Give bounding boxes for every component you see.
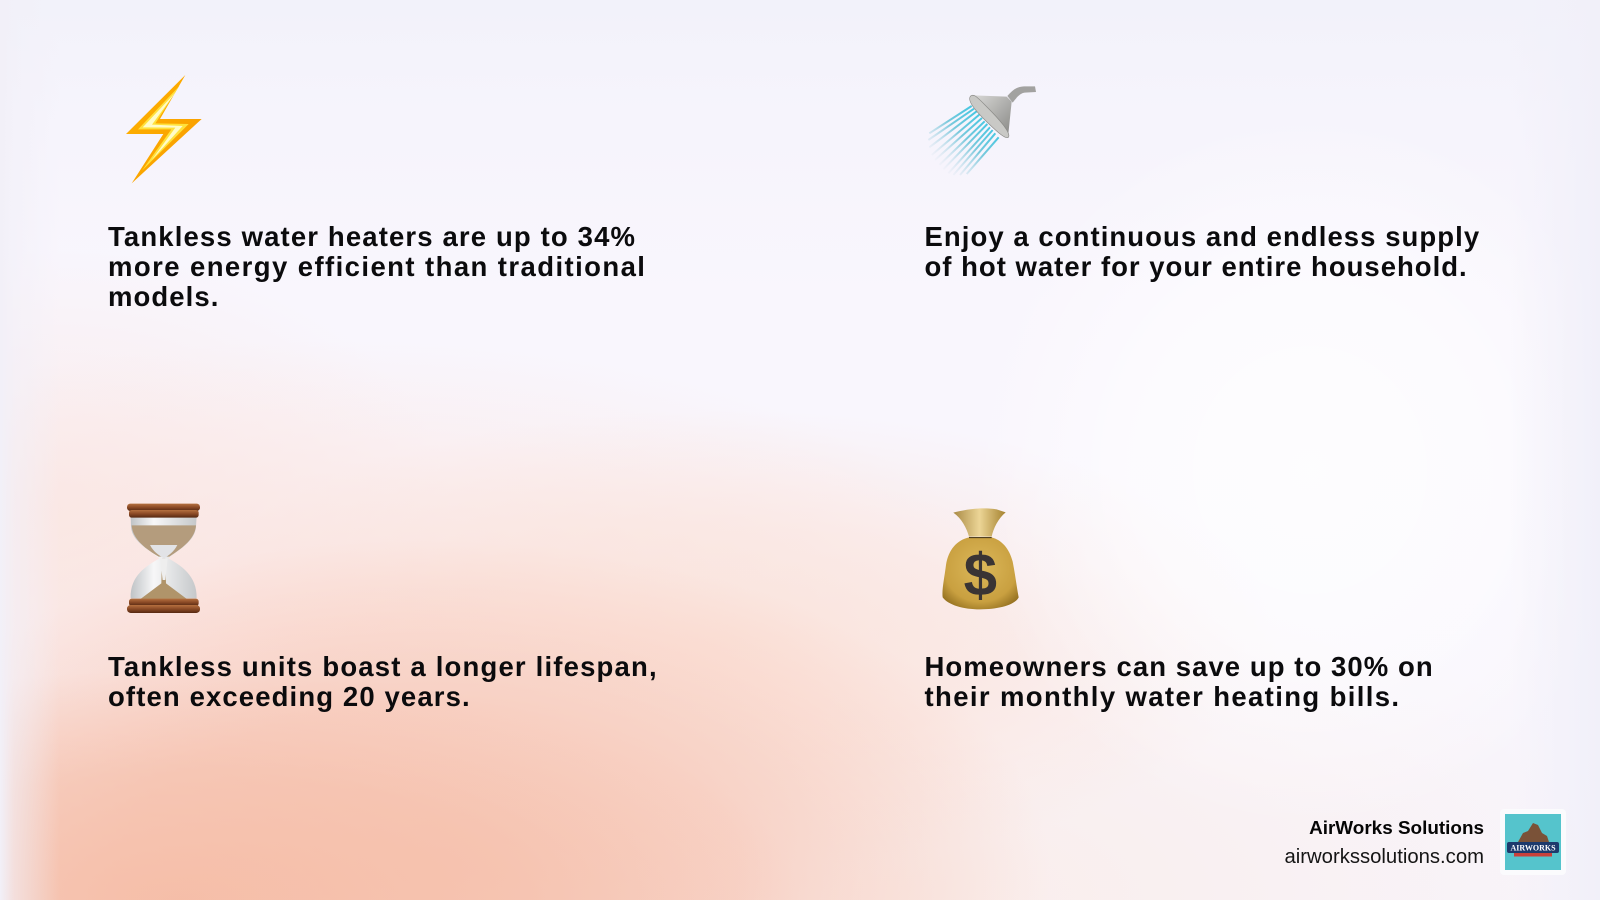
footer website: airworkssolutions.com <box>1284 846 1484 868</box>
icon: money bag: $ <box>964 541 997 608</box>
icon: hourglass <box>127 504 200 613</box>
text: endless hot water: Enjoy a continuous and endless supply <box>924 221 1480 252</box>
icon: shower head <box>928 86 1036 176</box>
icon: lightning bolt <box>126 75 202 184</box>
text: monthly savings <box>924 651 1434 712</box>
text: endless hot water: of hot water for your entire household. <box>924 251 1468 282</box>
logo <box>1505 809 1566 875</box>
text: longer lifespan <box>108 651 658 712</box>
text: monthly savings: Homeowners can save up to 30% on <box>924 651 1434 682</box>
text: energy efficiency: models. <box>108 281 219 312</box>
text: longer lifespan: Tankless units boast a longer lifespan, <box>108 651 658 682</box>
text: endless hot water <box>924 221 1480 282</box>
text: energy efficiency: Tankless water heaters are up to 34% <box>108 221 636 252</box>
text: monthly savings: their monthly water heating bills. <box>924 681 1400 712</box>
icon: money bag <box>942 508 1019 610</box>
logo: AIRWORKS <box>1510 844 1556 852</box>
text: energy efficiency: more energy efficient than traditional <box>108 251 646 282</box>
footer brand name: AirWorks Solutions <box>1309 818 1484 839</box>
text: longer lifespan: often exceeding 20 years. <box>108 681 471 712</box>
text: energy efficiency <box>108 221 646 312</box>
